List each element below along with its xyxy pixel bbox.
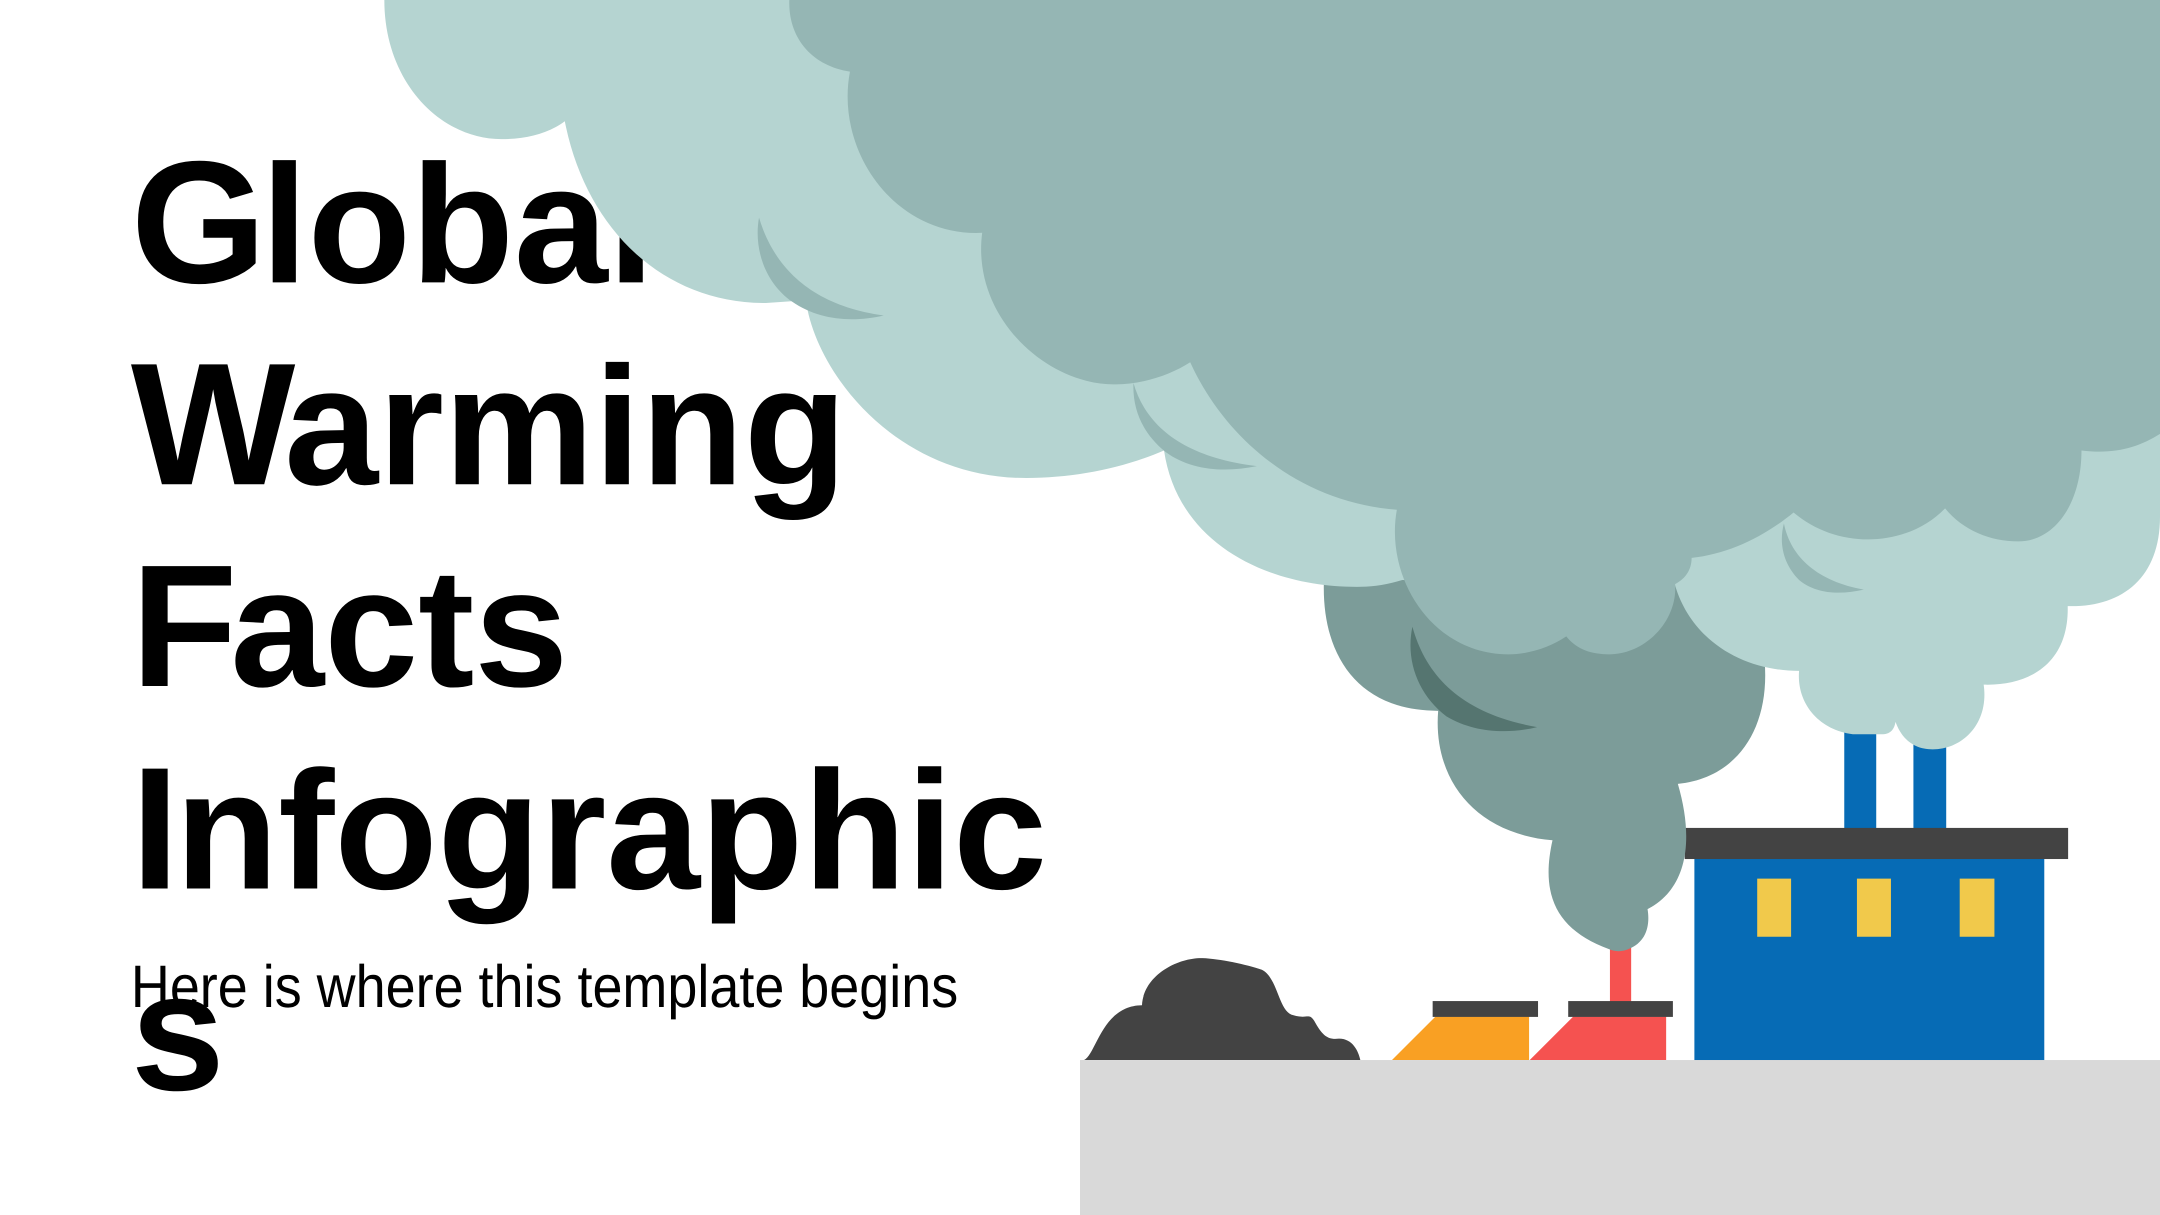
icon: coal pile <box>1084 958 1360 1060</box>
dark smoke shading <box>1410 627 1537 731</box>
small red factory <box>1530 944 1673 1060</box>
subtitle: Here is where this template begins <box>131 955 958 1021</box>
title: Global <box>131 124 655 320</box>
blue factory building <box>1694 858 2044 1060</box>
title: Infographic <box>131 730 1047 926</box>
red chimney <box>1610 944 1631 1001</box>
blue factory <box>1685 730 2068 1060</box>
orange building cap <box>1433 1001 1538 1017</box>
medium smoke cloud <box>789 0 2160 654</box>
title: s <box>131 937 225 1125</box>
light smoke cloud <box>384 0 2160 749</box>
light cloud shading <box>758 218 1864 593</box>
title: Warming <box>131 326 847 521</box>
blue chimneys <box>1844 730 1946 829</box>
title: Facts <box>131 528 568 723</box>
dark smoke plume <box>1324 551 1765 951</box>
ground <box>1080 1060 2160 1215</box>
title <box>131 124 1047 1125</box>
orange building <box>1392 1017 1529 1060</box>
red building cap <box>1568 1001 1673 1017</box>
factory roof <box>1685 828 2068 859</box>
factory windows <box>1757 879 1994 937</box>
small orange factory <box>1392 1001 1538 1060</box>
red building <box>1530 1017 1666 1060</box>
